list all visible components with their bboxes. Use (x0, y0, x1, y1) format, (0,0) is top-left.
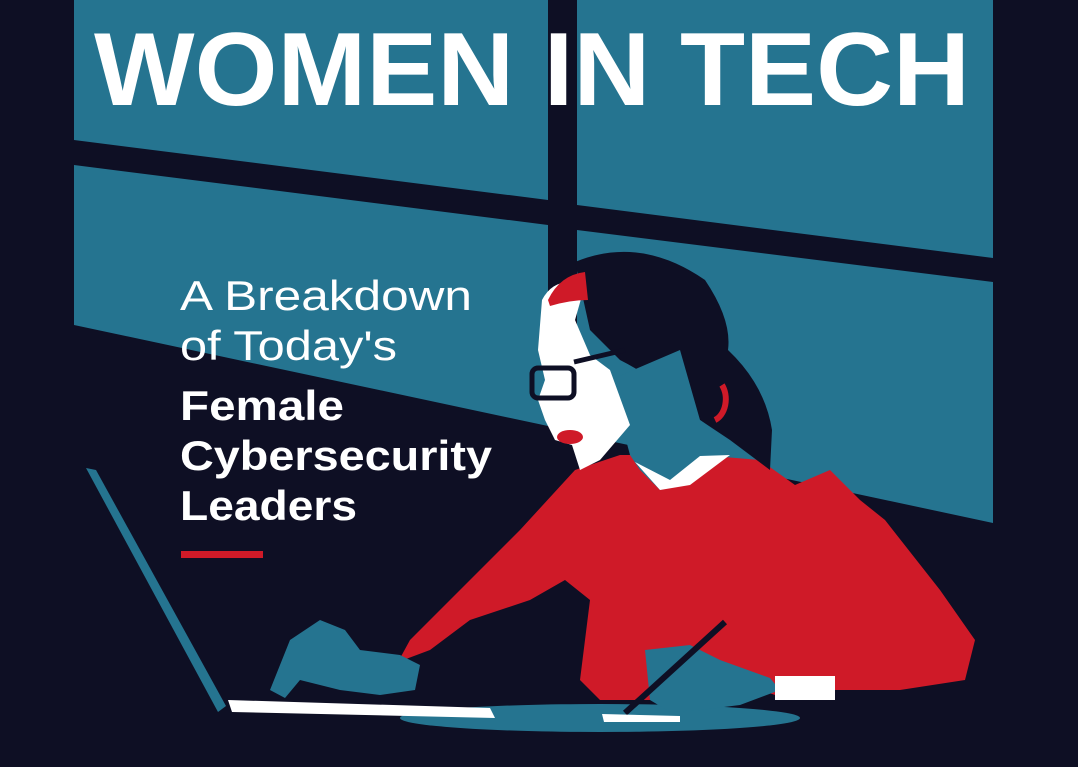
illustration: woman at laptop (86, 252, 975, 732)
subtitle: Cybersecurity (180, 432, 493, 479)
neck (610, 350, 735, 490)
subtitle: Leaders (180, 482, 357, 529)
sleeve cuff (775, 676, 835, 700)
subtitle: of Today's (180, 322, 397, 369)
earring (715, 385, 726, 420)
glasses (532, 350, 625, 398)
keyboard (228, 700, 495, 718)
red underline accent (181, 551, 263, 558)
hair band (548, 272, 588, 306)
subtitle: Female (180, 382, 344, 429)
subtitle (180, 272, 493, 529)
face (538, 282, 630, 470)
subtitle: A Breakdown (180, 272, 472, 319)
hair (575, 252, 772, 470)
notepad (602, 714, 680, 722)
desk (400, 704, 800, 732)
title: WOMEN IN TECH (94, 12, 970, 128)
window panes (74, 0, 993, 523)
sweater (398, 455, 975, 700)
pen (625, 622, 725, 713)
laptop screen edge (86, 468, 226, 712)
lips (557, 430, 583, 444)
white collar (635, 455, 730, 490)
left hand (270, 620, 420, 698)
right hand with pen (645, 645, 780, 712)
